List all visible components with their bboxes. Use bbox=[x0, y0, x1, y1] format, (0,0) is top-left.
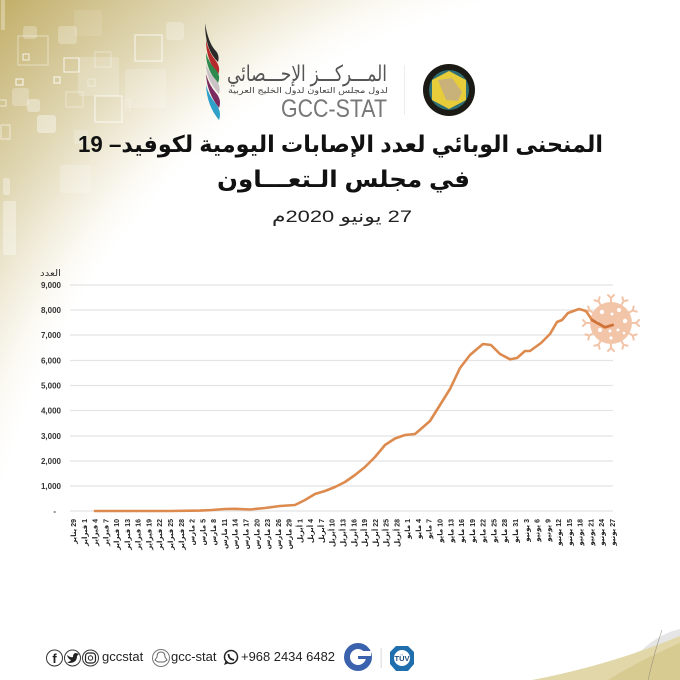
x axis labels: 7 أبريل bbox=[317, 519, 326, 543]
y axis labels: 2,000 bbox=[41, 457, 62, 466]
y axis labels: 1,000 bbox=[41, 482, 62, 491]
x axis labels: 1 فبراير bbox=[82, 519, 89, 547]
x axis labels: 13 مايو bbox=[448, 519, 455, 544]
x axis labels: 19 أبريل bbox=[360, 519, 369, 547]
bottom right swoosh bbox=[532, 629, 680, 680]
icon: TUV certification bbox=[390, 646, 414, 671]
logo latin name: GCC-STAT bbox=[281, 95, 387, 123]
date: 27 يونيو 2020م bbox=[272, 207, 412, 226]
y axis labels: 9,000 bbox=[41, 281, 62, 290]
x axis labels: 25 فبراير bbox=[168, 519, 175, 551]
title line 1: المنحنى الوبائي لعدد الإصابات اليومية لكوفيد– 19 bbox=[78, 131, 603, 158]
x axis labels: 26 مارس bbox=[276, 519, 283, 549]
logo: GCC-STAT bbox=[205, 23, 475, 123]
x axis labels: 17 مارس bbox=[244, 519, 250, 549]
handle: gccstat: gccstat bbox=[102, 649, 144, 664]
x axis labels: 10 أبريل bbox=[328, 519, 337, 547]
x axis labels: 5 مارس bbox=[200, 519, 207, 546]
x axis labels: 6 يونيو bbox=[534, 519, 542, 543]
x axis labels: 27 يونيو bbox=[610, 519, 617, 547]
x axis labels: 4 فبراير bbox=[93, 519, 100, 547]
x axis labels: 29 يناير bbox=[71, 519, 78, 545]
x axis labels: 13 فبراير bbox=[125, 519, 132, 551]
x axis labels: 23 مارس bbox=[265, 519, 272, 549]
icon: whatsapp bbox=[224, 650, 238, 665]
x axis labels: 11 مارس bbox=[222, 519, 229, 549]
icon: instagram bbox=[82, 650, 98, 666]
x axis labels: 7 فبراير bbox=[103, 519, 110, 547]
x axis labels: 15 يونيو bbox=[567, 519, 574, 547]
x axis labels: 20 مارس bbox=[254, 519, 261, 549]
icon: logo ribbons bbox=[205, 23, 220, 120]
icon: facebook: f bbox=[52, 651, 57, 666]
x axis labels: 1 مايو bbox=[405, 519, 412, 540]
phone number: +968 2434 6482 bbox=[241, 649, 335, 664]
y axis title: العدد bbox=[40, 268, 61, 278]
x axis labels: 29 مارس bbox=[287, 519, 294, 549]
x axis labels: 24 يونيو bbox=[599, 519, 606, 547]
x axis labels: 10 مايو bbox=[438, 519, 444, 544]
data line bbox=[95, 309, 592, 511]
title bbox=[78, 131, 603, 193]
divider bbox=[380, 648, 382, 668]
logo arabic subtitle: لدول مجلس التعاون لدول الخليج العربية bbox=[228, 86, 388, 95]
handle: gcc-stat: gcc-stat bbox=[171, 649, 217, 664]
data line end over virus bbox=[592, 320, 613, 327]
icon: TUV certification: TÜV bbox=[394, 654, 410, 663]
x axis labels: 8 مارس bbox=[211, 519, 218, 546]
x axis labels: 1 أبريل bbox=[295, 519, 304, 543]
y axis labels: 3,000 bbox=[41, 432, 62, 441]
x axis labels: 22 مايو bbox=[481, 519, 488, 544]
y axis labels: 5,000 bbox=[41, 382, 62, 390]
title line 2: في مجلس الـتعـــاون bbox=[217, 166, 470, 193]
y axis labels: 4,000 bbox=[41, 406, 62, 416]
x axis labels: 18 يونيو bbox=[578, 519, 585, 547]
x axis labels: 7 مايو bbox=[427, 519, 434, 540]
x axis labels: 9 يونيو bbox=[545, 519, 552, 543]
x axis labels: 14 مارس bbox=[233, 519, 240, 549]
logo arabic name: المـــركـــز الإحـــصائي bbox=[227, 61, 387, 87]
x axis labels: 25 مايو bbox=[491, 519, 498, 544]
x axis labels: 19 فبراير bbox=[146, 519, 154, 551]
x axis labels: 28 أبريل bbox=[392, 519, 401, 547]
y axis labels: 6,000 bbox=[41, 356, 62, 366]
x axis labels: 2 مارس bbox=[190, 519, 197, 546]
x axis labels: 25 أبريل bbox=[382, 519, 391, 547]
icon: snapchat bbox=[152, 650, 170, 666]
x axis labels: 16 أبريل bbox=[349, 519, 358, 547]
x axis labels: 16 مايو bbox=[459, 519, 466, 544]
x axis labels: 22 أبريل bbox=[371, 519, 380, 547]
x axis labels: 4 أبريل bbox=[306, 519, 315, 543]
x axis labels: 31 مايو bbox=[513, 519, 520, 544]
y axis labels bbox=[41, 281, 62, 516]
footer contacts bbox=[46, 646, 414, 671]
divider bbox=[404, 65, 405, 115]
icon: GCC emblem bbox=[423, 64, 475, 116]
x axis labels: 21 يونيو bbox=[588, 519, 595, 547]
y axis labels: 8,000 bbox=[41, 306, 62, 315]
decorative outlined squares bbox=[0, 35, 162, 139]
grid lines bbox=[70, 285, 613, 511]
line chart bbox=[40, 268, 639, 551]
x axis labels: 19 مايو bbox=[470, 519, 477, 544]
x axis labels: 16 فبراير bbox=[136, 519, 143, 551]
y axis labels: 7,000 bbox=[41, 331, 62, 340]
x axis labels: 28 مايو bbox=[502, 519, 509, 544]
icon: facebook bbox=[46, 650, 62, 666]
x axis labels: 10 فبراير bbox=[114, 519, 121, 551]
y axis labels: - bbox=[53, 507, 56, 516]
x axis labels: 3 يونيو bbox=[524, 519, 531, 543]
x axis labels bbox=[71, 519, 617, 551]
icon: twitter bbox=[64, 650, 80, 666]
decorative squares bbox=[1, 0, 184, 255]
x axis labels: 4 مايو bbox=[416, 519, 423, 540]
x axis labels: 22 فبراير bbox=[157, 519, 164, 551]
x axis labels: 28 فبراير bbox=[179, 519, 186, 551]
icon: quality certification bbox=[347, 646, 371, 668]
x axis labels: 12 يونيو bbox=[556, 519, 563, 547]
x axis labels: 13 أبريل bbox=[338, 519, 348, 547]
icon: virus bbox=[583, 295, 639, 351]
